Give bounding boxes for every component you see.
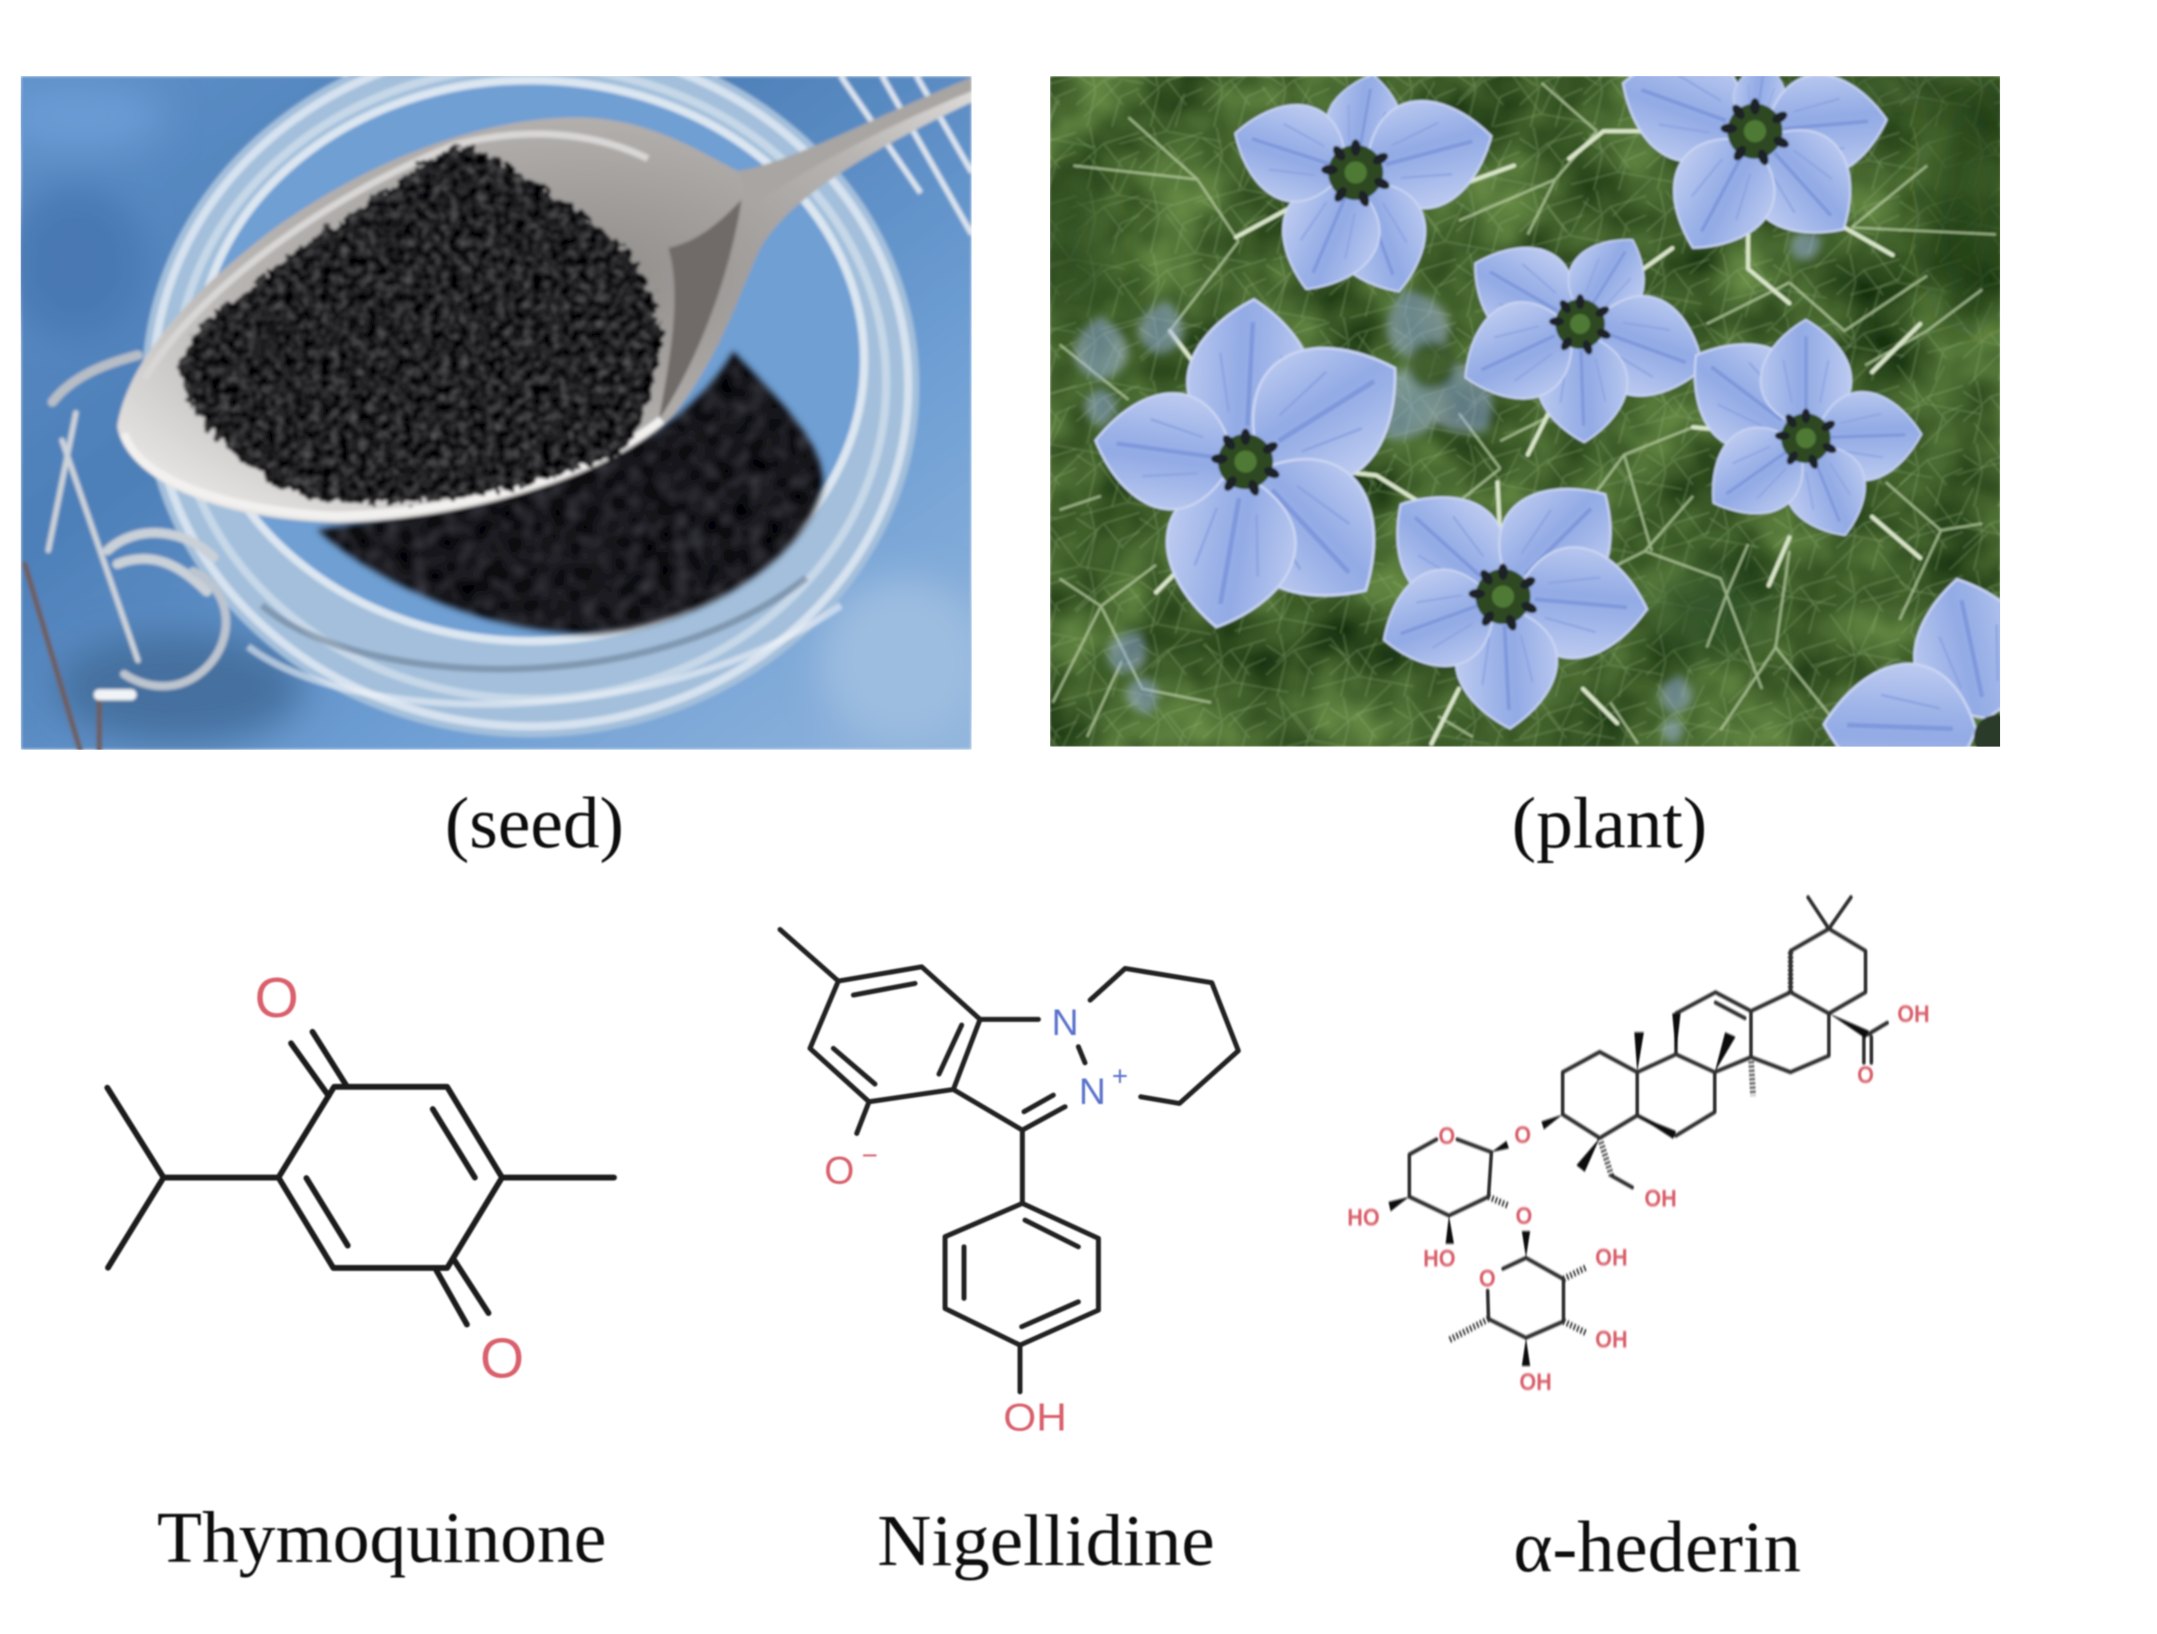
ring skeleton (1409, 897, 1887, 1338)
dark foliage patches (1043, 75, 2010, 647)
photo: black seeds on a spoon over a glass jar (0, 33, 985, 750)
jar body (142, 33, 919, 737)
atom labels: HO (1423, 1244, 1456, 1272)
oxygen atoms (255, 967, 524, 1391)
caption: thymoquinone: Thymoquinone (157, 1497, 606, 1578)
nitrogen atoms: N (1052, 1001, 1079, 1043)
structure: thymoquinone (107, 967, 614, 1391)
backdrop: fine fronds (1050, 76, 2000, 747)
atom labels: O (1515, 1202, 1532, 1229)
thick flower stalks (1156, 131, 1920, 744)
nitrogen atoms: + (1112, 1060, 1128, 1091)
caption: nigellidine: Nigellidine (877, 1500, 1215, 1581)
flower 3 (1463, 237, 1702, 445)
backdrop: blue surface (21, 76, 972, 750)
atom labels: O (1438, 1122, 1455, 1149)
backdrop: darker shadow patches (0, 84, 985, 743)
atom labels: O (1857, 1061, 1874, 1088)
atom labels (1347, 1000, 1930, 1395)
backdrop: mottled green foliage (1050, 76, 2000, 747)
caption: plant: (plant) (1512, 783, 1707, 864)
jar hinge, top right (841, 76, 972, 234)
oxygen labels: − (862, 1139, 878, 1170)
oxygen labels: O (824, 1150, 854, 1193)
flower 2 (1620, 76, 1890, 251)
oxygen atoms: O (480, 1328, 524, 1391)
nitrogen atoms: N (1079, 1070, 1106, 1112)
flower: faint distant blossoms (1075, 225, 1827, 744)
atom labels: O (1514, 1121, 1531, 1148)
atom labels: OH (1644, 1184, 1677, 1212)
flower 5 (1380, 486, 1650, 732)
flower 7, cropped at the corner (1822, 567, 2044, 793)
atom labels: OH (1595, 1325, 1628, 1353)
oxygen atoms: O (255, 967, 299, 1030)
atom labels: O (1479, 1264, 1496, 1292)
flower 6 (1692, 317, 1924, 538)
jar clasp wires (25, 355, 226, 750)
structure: nigellidine (780, 929, 1238, 1440)
bonds (107, 1032, 614, 1325)
photo: blue-flowered nigella plant (1050, 76, 2000, 747)
caption: alpha-hederin: α-hederin (1513, 1506, 1801, 1587)
atom labels: OH (1897, 1000, 1930, 1027)
spoon (117, 77, 972, 523)
caption: seed: (seed) (445, 783, 624, 864)
oxygen labels: OH (1003, 1397, 1067, 1440)
flower 4 (1092, 296, 1398, 630)
seeds heaped in the spoon (179, 145, 662, 503)
seeds inside the jar (317, 351, 823, 634)
structure: alpha-hederin (1347, 897, 1930, 1395)
atom labels: OH (1595, 1243, 1628, 1271)
atom labels: HO (1347, 1203, 1380, 1231)
atom labels: OH (1519, 1368, 1552, 1395)
bonds (780, 929, 1238, 1392)
oxygen labels (824, 1139, 1067, 1440)
nitrogen atoms (1052, 1001, 1128, 1112)
flower 1 (1232, 76, 1494, 294)
pale branching stems (1053, 83, 1996, 744)
stereo wedges (1389, 1013, 1869, 1366)
hashed bonds (1449, 952, 1791, 1340)
